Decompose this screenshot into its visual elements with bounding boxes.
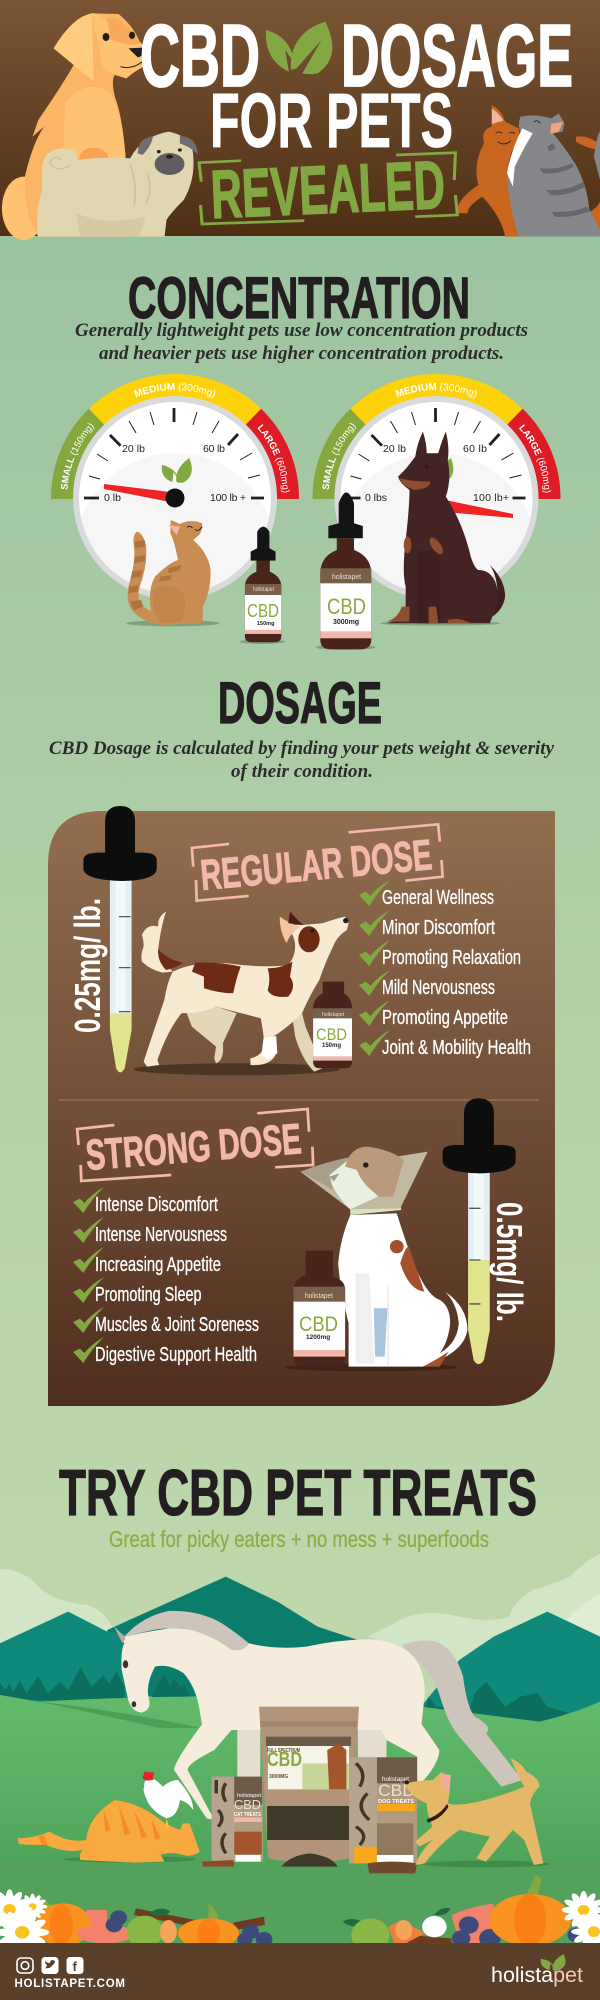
text: concentration intro [75,320,528,364]
heading: Dosage: DOSAGE [218,671,382,736]
list: regular dose uses: Mild Nervousness [382,977,495,999]
text: dosage intro: of their condition. [231,761,373,782]
illustration: doberman [380,432,505,626]
bottle: 150mg: 150mg [257,621,274,627]
landscape: clouds, mountains, trees, grass [0,1553,600,1943]
icon: instagram [17,1958,33,1973]
bottle: 150mg [240,527,285,644]
animals: cat and rooster [17,1772,200,1863]
gauge: low concentration [51,374,299,597]
gauge: high concentration: 0 lbs [365,492,387,504]
title: CBD: CBD [140,6,260,105]
stamp: REVEALED: REVEALED [209,147,446,233]
gauge: low concentration: 100 lb + [210,492,246,504]
gauge: high concentration: 20 lb [383,443,406,455]
bottle: regular 150mg [313,982,352,1068]
icon: facebook [66,1957,84,1974]
list: strong dose uses: Increasing Appetite [95,1254,221,1276]
icon: twitter [42,1957,58,1974]
product: horse pellets bag: CBD [267,1749,302,1771]
illustration: dog looking up [133,912,349,1075]
bottle: 3000mg: holistapet [332,572,362,581]
header banner [0,0,600,240]
bottle: strong 1200mg: 1200mg [306,1334,330,1341]
list: regular dose uses: Promoting Relaxation [382,947,521,969]
bottle: 3000mg: CBD [327,594,366,619]
stamp: strong dose: STRONG DOSE [84,1115,303,1180]
stamp: regular dose [192,824,443,901]
product: dog treats bag: holistapet [382,1777,409,1783]
bottle: 150mg: CBD [247,601,279,621]
product: cat treats bag [202,1777,263,1867]
gauge: high concentration: MEDIUM (300mg) [395,383,477,398]
illustration: golden dog and pug [2,13,198,240]
product: cat treats bag: CBD [234,1797,261,1812]
product: horse pellets bag: 3000MG [269,1774,288,1780]
dropper: regular dose [83,806,157,1072]
panel: dose card [48,806,555,1406]
list: regular dose uses: Joint & Mobility Health [382,1037,531,1059]
gauge: high concentration: LARGE (600mg) [519,424,552,492]
list: regular dose uses: Minor Discomfort [382,917,495,939]
product: dog treats bag: DOG TREATS [378,1799,414,1805]
gauge labels: SMALL (150mg) [322,423,356,490]
list: strong dose uses: Promoting Sleep [95,1284,202,1306]
stamp: strong dose [77,1109,313,1181]
title: FOR PETS: FOR PETS [210,78,453,164]
gauge: high concentration: 100 lb+ [473,492,509,504]
text: concentration intro: and heavier pets use higher concentration products. [99,343,504,364]
bottle: regular 150mg: holistapet [322,1012,344,1018]
text: dosage intro: CBD Dosage is calculated by finding your pets weight & severity [49,738,555,759]
list: strong dose uses: Intense Discomfort [95,1194,218,1216]
text: dosage intro [49,738,555,782]
product: cat treats bag: CAT TREATS [234,1812,262,1818]
list: regular dose uses: General Wellness [382,887,494,909]
text: treats tagline: Great for picky eaters + no mess + superfoods [109,1526,489,1552]
bottle: 3000mg: 3000mg [333,619,359,626]
bottle: regular 150mg: CBD [316,1025,347,1044]
needle [445,500,513,518]
illustration: white horse [114,1611,522,1820]
label: 0.5mg per lb: 0.5mg/ lb. [489,1202,530,1322]
gauge labels: SMALL (150mg) [60,423,94,490]
product: dog treats bag [349,1757,417,1873]
product: dog treats bag: CBD [378,1781,415,1800]
needle [104,484,170,502]
animal: tan dog [405,1758,550,1867]
gauge: low concentration: 20 lb [122,443,145,455]
icon: green leaves [266,22,332,74]
label: 0.25mg per lb: 0.25mg/ lb. [67,898,108,1033]
gauge: low concentration: 60 lb [203,443,225,455]
icon: facebook: f [72,1959,78,1974]
illustration: two cats [457,105,600,237]
bottle: strong 1200mg: CBD [299,1313,338,1336]
footer bar [0,1943,600,2000]
bottle: strong 1200mg: holistapet [305,1293,333,1300]
list: strong dose uses: Intense Nervousness [95,1224,227,1246]
gauge: low concentration: 0 lb [104,492,121,504]
list: strong dose uses [73,1187,259,1366]
bottle: 150mg: holistapet [253,587,274,593]
list: strong dose uses: Muscles & Joint Soreness [95,1314,259,1336]
dropper: strong dose [443,1098,516,1364]
bottle: 3000mg [316,492,375,650]
logo: holistapet: holistapet [491,1964,583,1987]
product: horse pellets bag [259,1707,359,1867]
gauge: high concentration: 60 lb [463,443,487,455]
illustration: products and pets [17,1707,550,1873]
illustration: dog with cone [285,1147,467,1371]
website: HOLISTAPET.COM [14,1978,125,1990]
gauge: low concentration: LARGE (600mg) [258,424,290,492]
list: regular dose uses [359,880,531,1059]
product: horse pellets bag: FULL SPECTRUM [267,1748,300,1754]
product: cat treats bag: holistapet [237,1793,262,1799]
list: regular dose uses: Promoting Appetite [382,1007,508,1029]
illustration: cat looking at gauge [126,520,220,626]
gauge: high concentration [312,374,560,596]
stamp: regular dose: REGULAR DOSE [199,831,434,900]
bottle: regular 150mg: 150mg [322,1043,341,1049]
text: concentration intro: Generally lightweight pets use low concentration products [75,320,528,341]
stamp: REVEALED [199,147,457,233]
logo: holistapet [491,1954,583,1987]
illustration: superfoods row [0,1875,600,1956]
bottle: strong 1200mg [293,1251,345,1367]
list: strong dose uses: Digestive Support Health [95,1344,257,1366]
gauge: low concentration: MEDIUM (300mg) [134,382,216,398]
